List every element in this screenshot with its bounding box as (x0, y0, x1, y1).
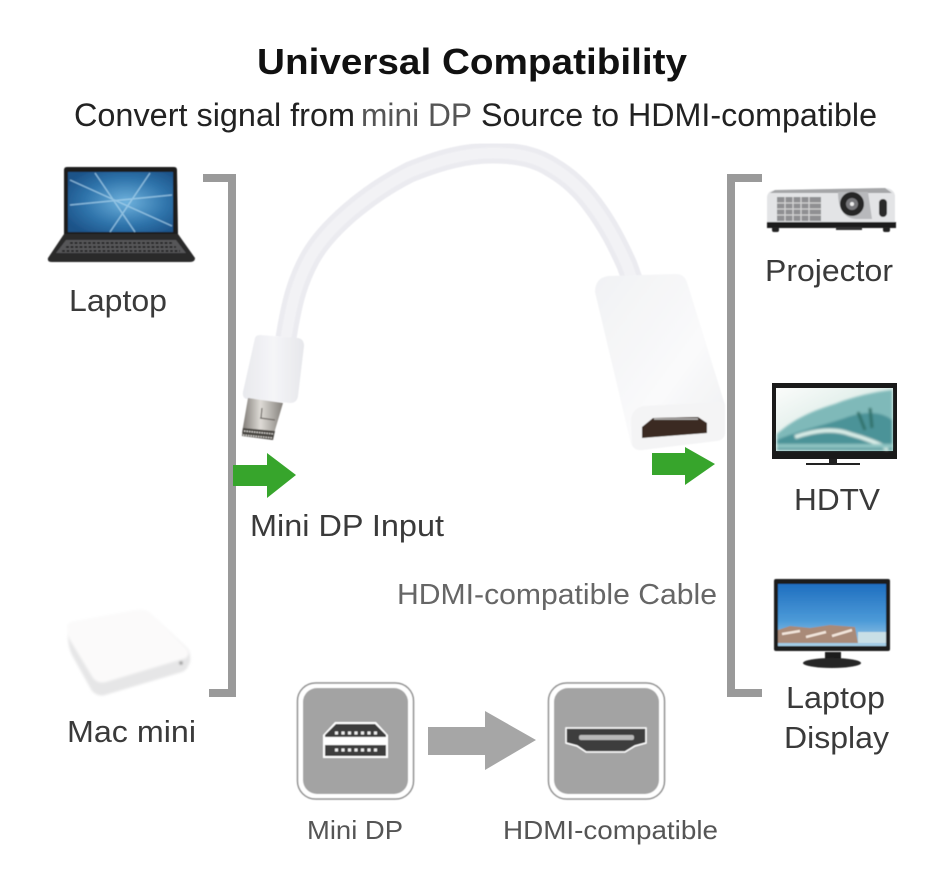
icon: HDMI port (548, 683, 664, 799)
cable (286, 153, 633, 338)
label: HDMI-compatible: HDMI-compatible (503, 815, 718, 845)
right bracket (731, 178, 762, 693)
subtitle: Source to HDMI-compatible (481, 97, 877, 133)
label: HDTV: HDTV (794, 482, 880, 517)
left bracket (203, 178, 232, 693)
label: Laptop Display: Laptop (786, 680, 885, 715)
HDMI adapter (595, 274, 725, 450)
icon: laptop (48, 167, 195, 262)
title: Universal Compatibility (257, 41, 687, 82)
arrow: conversion (428, 711, 536, 770)
subtitle: mini DP (361, 97, 472, 133)
label: Mini DP: Mini DP (307, 815, 403, 845)
arrow: mini DP input (233, 453, 296, 498)
label: HDMI-compatible Cable: HDMI-compatible Cable (397, 579, 717, 611)
label: Mini DP Input: Mini DP Input (250, 508, 444, 543)
mini DP plug (242, 335, 304, 440)
icon: laptop display (774, 579, 890, 668)
label: Mac mini: Mac mini (67, 714, 196, 749)
icon: projector (767, 188, 896, 232)
label: Laptop Display (784, 680, 890, 755)
arrow: HDMI output (652, 447, 715, 485)
icon: HDTV (772, 383, 897, 465)
label: Projector: Projector (765, 253, 893, 288)
subtitle (74, 97, 877, 133)
icon: Mac mini (68, 610, 190, 696)
subtitle: Convert signal from (74, 97, 355, 133)
label: Laptop: Laptop (69, 283, 167, 318)
label: Laptop Display: Display (784, 720, 890, 755)
icon: Mini DP port (298, 683, 414, 799)
